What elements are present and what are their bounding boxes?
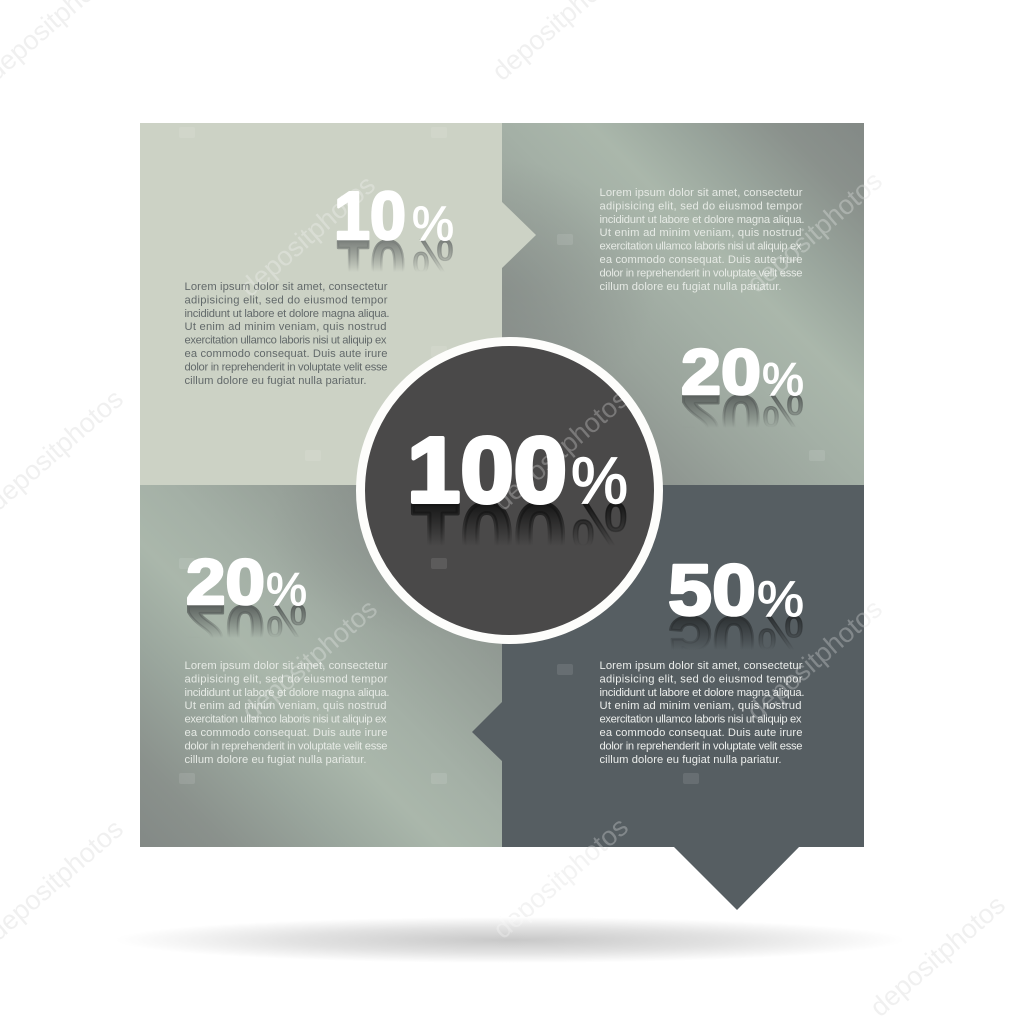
percentage: 50%: % bbox=[757, 571, 804, 627]
text block: bottom left: cillum dolore eu fugiat nulla pariatur. bbox=[184, 754, 366, 766]
watermark over panels: depositphotos bbox=[236, 594, 383, 727]
percentage: 20% top right: 20 bbox=[681, 336, 761, 408]
watermark over panels bbox=[179, 127, 888, 945]
watermark on white background: depositphotos bbox=[487, 812, 634, 945]
watermark on white background: depositphotos bbox=[741, 594, 888, 727]
percentage: 10% bbox=[334, 178, 454, 302]
text block: bottom right: ea commodo consequat. Duis aute irure bbox=[600, 727, 802, 739]
percentage: 20% bottom left: 20 bbox=[186, 546, 265, 618]
watermark on white background: depositphotos bbox=[741, 166, 888, 299]
percentage: 20% top right: % bbox=[762, 385, 804, 437]
percentage: 20% bottom left: % bbox=[266, 595, 307, 647]
reflection of 100%: % bbox=[571, 489, 628, 563]
text block: bottom right: adipisicing elit, sed do eiusmod tempor bbox=[600, 673, 803, 685]
text block: bottom left: dolor in reprehenderit in voluptate velit esse bbox=[184, 740, 388, 752]
number: 100: 100 bbox=[407, 418, 567, 522]
text block: top right: dolor in reprehenderit in voluptate velit esse bbox=[600, 267, 802, 279]
percentage: 20% top right bbox=[681, 336, 804, 454]
text block: top right: cillum dolore eu fugiat nulla pariatur. bbox=[600, 281, 782, 293]
watermark over panels: depositphotos bbox=[234, 170, 381, 303]
percentage: 10%: 10 bbox=[334, 178, 406, 254]
watermark over panels: depositphotos bbox=[741, 166, 888, 299]
panel: top right 20% bbox=[502, 123, 864, 485]
percentage: 10%: % bbox=[412, 229, 454, 282]
text block: top right: adipisicing elit, sed do eiusmod tempor bbox=[600, 200, 803, 212]
text block: top right: incididunt ut labore et dolore magna aliqua. bbox=[600, 214, 804, 226]
panel: bottom right 50% with pointer bbox=[502, 485, 864, 910]
percentage: 20% bottom left bbox=[186, 546, 307, 664]
watermark over panels: depositphotos bbox=[487, 812, 634, 945]
percentage: 10%: % bbox=[412, 198, 454, 251]
percentage: 10%: 10 bbox=[334, 226, 406, 302]
center circle: 100% bbox=[360, 342, 658, 640]
watermark on white background: depositphotos bbox=[864, 890, 1011, 1020]
percentage: 20% bottom left: 20 bbox=[186, 592, 265, 664]
text block: top left: Lorem ipsum dolor sit amet, consectetur bbox=[184, 281, 388, 293]
text block: bottom left: exercitation ullamco laboris nisi ut aliquip ex bbox=[184, 714, 387, 726]
percentage: 50%: % bbox=[757, 605, 804, 661]
text block: bottom right: Lorem ipsum dolor sit amet, consectetur bbox=[600, 660, 803, 672]
panel: bottom left 20% bbox=[140, 485, 502, 847]
text block: top left: exercitation ullamco laboris nisi ut aliquip ex bbox=[184, 335, 387, 347]
text block: bottom left: Lorem ipsum dolor sit amet, consectetur bbox=[184, 660, 388, 672]
text block: bottom right: cillum dolore eu fugiat nulla pariatur. bbox=[600, 754, 782, 766]
text block: top right: exercitation ullamco laboris nisi ut aliquip ex bbox=[600, 241, 802, 253]
arrow: speech bubble pointer bbox=[673, 846, 800, 910]
text block: bottom right: exercitation ullamco laboris nisi ut aliquip ex bbox=[600, 714, 802, 726]
percentage: 20% top right: 20 bbox=[681, 382, 761, 454]
text block: top left: cillum dolore eu fugiat nulla pariatur. bbox=[184, 375, 366, 387]
watermark over panels: depositphotos bbox=[487, 384, 634, 517]
panel: top left 10% bbox=[140, 123, 502, 485]
percentage: 50%: 50 bbox=[668, 551, 756, 631]
text block: top left: Ut enim ad minim veniam, quis nostrud bbox=[184, 321, 386, 333]
text block: top right: Ut enim ad minim veniam, quis nostrud bbox=[600, 227, 802, 239]
text block: top left: ea commodo consequat. Duis aute irure bbox=[184, 348, 388, 360]
reflection of 100%: 100 bbox=[407, 484, 567, 588]
text block: bottom right: dolor in reprehenderit in voluptate velit esse bbox=[600, 740, 802, 752]
percentage: 20% top right: % bbox=[762, 353, 804, 405]
arrow: top left panel pointing right bbox=[501, 201, 536, 269]
text block: bottom left: adipisicing elit, sed do eiusmod tempor bbox=[184, 673, 388, 685]
text block: bottom left: ea commodo consequat. Duis aute irure bbox=[184, 727, 388, 739]
ground shadow bbox=[115, 917, 905, 963]
text block: bottom left: Ut enim ad minim veniam, quis nostrud bbox=[184, 700, 386, 712]
text block: bottom right: Ut enim ad minim veniam, quis nostrud bbox=[600, 700, 802, 712]
text block: top right: Lorem ipsum dolor sit amet, consectetur bbox=[600, 187, 803, 199]
text block: top right: ea commodo consequat. Duis aute irure bbox=[600, 254, 802, 266]
percentage: 20% bottom left: % bbox=[266, 563, 307, 615]
text block: top left: adipisicing elit, sed do eiusmod tempor bbox=[184, 294, 388, 306]
watermark over panels: depositphotos bbox=[741, 594, 888, 727]
text block: top left: incididunt ut labore et dolore magna aliqua. bbox=[184, 308, 390, 320]
percentage: 50% bbox=[668, 551, 804, 681]
text block: bottom left: incididunt ut labore et dolore magna aliqua. bbox=[184, 687, 390, 699]
percentage: 50%: 50 bbox=[668, 601, 756, 681]
arrow: bottom right panel pointing left bbox=[472, 701, 503, 762]
text block: top left: dolor in reprehenderit in voluptate velit esse bbox=[184, 361, 388, 373]
percent sign: % bbox=[571, 443, 628, 517]
text block: bottom right: incididunt ut labore et dolore magna aliqua. bbox=[600, 687, 804, 699]
